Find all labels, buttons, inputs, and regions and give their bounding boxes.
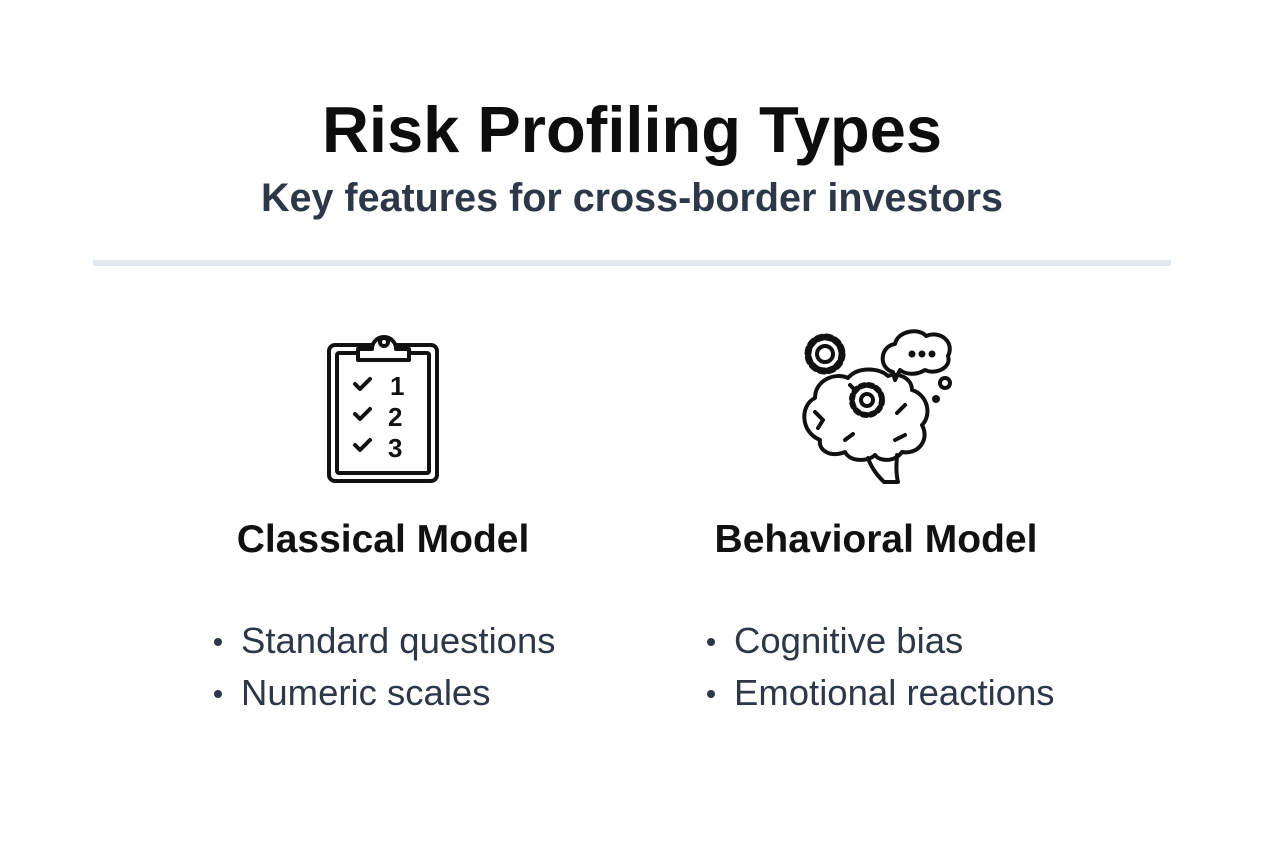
list: behavioral features — [707, 620, 1055, 713]
heading: behavioral model: Behavioral Model — [715, 518, 1037, 561]
icon: clipboard checklist — [327, 335, 439, 483]
list: classical features: Numeric scales — [241, 672, 490, 713]
icon: clipboard checklist: 1 — [390, 371, 404, 401]
icon: clipboard checklist: 3 — [388, 433, 402, 463]
icon: clipboard checklist: 2 — [388, 402, 402, 432]
list: behavioral features: Emotional reactions — [734, 672, 1055, 713]
heading: classical model: Classical Model — [237, 518, 529, 561]
subtitle: Key features for cross-border investors — [261, 176, 1003, 220]
title: Risk Profiling Types — [322, 93, 942, 166]
icon: brain with gears — [802, 329, 952, 484]
list: classical features — [214, 620, 556, 713]
list: behavioral features: Cognitive bias — [734, 620, 963, 661]
list: classical features: Standard questions — [241, 620, 556, 661]
